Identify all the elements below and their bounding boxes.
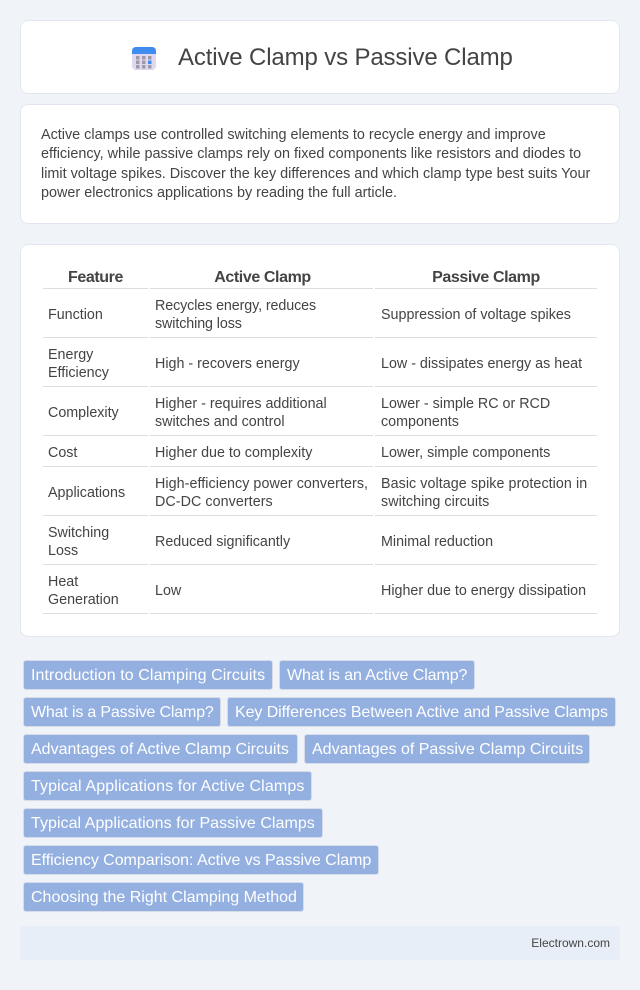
tag: Advantages of Passive Clamp Circuits	[312, 741, 583, 758]
tag: Typical Applications for Passive Clamps	[31, 815, 315, 832]
row: function: Function	[48, 307, 103, 323]
row: complexity: Lower - simple RC or RCD	[381, 396, 550, 412]
tag	[23, 771, 312, 801]
tag	[279, 660, 475, 690]
tag: Typical Applications for Active Clamps	[31, 778, 305, 795]
intro text card	[20, 104, 620, 224]
row: energy efficiency: Efficiency	[48, 365, 109, 381]
topic tags	[23, 660, 616, 912]
row: function: Suppression of voltage spikes	[381, 307, 571, 323]
row: switching loss: Reduced significantly	[155, 534, 290, 550]
row: heat generation: Heat	[48, 574, 78, 590]
row: switching loss: Switching	[48, 525, 109, 541]
row: energy efficiency: Low - dissipates energy as heat	[381, 356, 582, 372]
row: function: switching loss	[155, 316, 242, 332]
intro paragraph: limit voltage spikes. Discover the key differences and which clamp type best suits Your	[41, 166, 590, 182]
intro paragraph: power electronics applications by reading the full article.	[41, 185, 397, 201]
row: applications: switching circuits	[381, 494, 489, 510]
row: heat generation	[48, 574, 586, 608]
intro paragraph: efficiency, while passive clamps rely on fixed components like resistors and diodes to	[41, 146, 581, 162]
row: complexity: switches and control	[155, 414, 285, 430]
row: applications: DC-DC converters	[155, 494, 273, 510]
tag: What is an Active Clamp?	[287, 667, 467, 684]
row: complexity: Higher - requires additional	[155, 396, 327, 412]
table header: Feature	[68, 269, 123, 286]
row: complexity: components	[381, 414, 459, 430]
comparison table card	[20, 244, 620, 637]
row: switching loss	[48, 525, 493, 559]
row: function: Recycles energy, reduces	[155, 298, 316, 314]
row: applications	[48, 476, 587, 510]
row: cost	[48, 445, 550, 461]
table header	[68, 269, 540, 286]
row: switching loss: Minimal reduction	[381, 534, 493, 550]
row: cost: Lower, simple components	[381, 445, 550, 461]
row: applications: Basic voltage spike protection in	[381, 476, 587, 492]
row: function	[48, 298, 571, 332]
row: complexity: Complexity	[48, 405, 119, 421]
tag	[23, 697, 221, 727]
row: heat generation: Generation	[48, 592, 119, 608]
icon: calendar	[132, 47, 156, 70]
tag	[23, 660, 273, 690]
tag: Choosing the Right Clamping Method	[31, 889, 297, 906]
table header: Passive Clamp	[432, 269, 540, 286]
footer credit: Electrown.com	[531, 936, 610, 950]
row: complexity	[48, 396, 550, 430]
footer	[20, 926, 620, 960]
table header: Active Clamp	[214, 269, 311, 286]
header card	[20, 20, 620, 94]
tag: Efficiency Comparison: Active vs Passive Clamp	[31, 852, 371, 869]
row: applications: High-efficiency power converters,	[155, 476, 368, 492]
row: cost: Cost	[48, 445, 77, 461]
title: Active Clamp vs Passive Clamp	[178, 44, 513, 71]
row: applications: Applications	[48, 485, 125, 501]
row: heat generation: Low	[155, 583, 181, 599]
row: cost: Higher due to complexity	[155, 445, 312, 461]
row: energy efficiency: Energy	[48, 347, 93, 363]
tag	[23, 845, 379, 875]
intro paragraph	[41, 127, 590, 201]
tag	[23, 882, 304, 912]
tag: Advantages of Active Clamp Circuits	[31, 741, 289, 758]
tag	[23, 734, 298, 764]
tag	[304, 734, 590, 764]
tag	[23, 808, 323, 838]
tag	[227, 697, 616, 727]
tag: What is a Passive Clamp?	[31, 704, 214, 721]
row: heat generation: Higher due to energy dissipation	[381, 583, 586, 599]
row: energy efficiency: High - recovers energy	[155, 356, 300, 372]
row: switching loss: Loss	[48, 543, 78, 559]
intro paragraph: Active clamps use controlled switching elements to recycle energy and improve	[41, 127, 546, 143]
tag: Introduction to Clamping Circuits	[31, 667, 265, 684]
tag: Key Differences Between Active and Passive Clamps	[235, 704, 608, 721]
row: energy efficiency	[48, 347, 582, 381]
